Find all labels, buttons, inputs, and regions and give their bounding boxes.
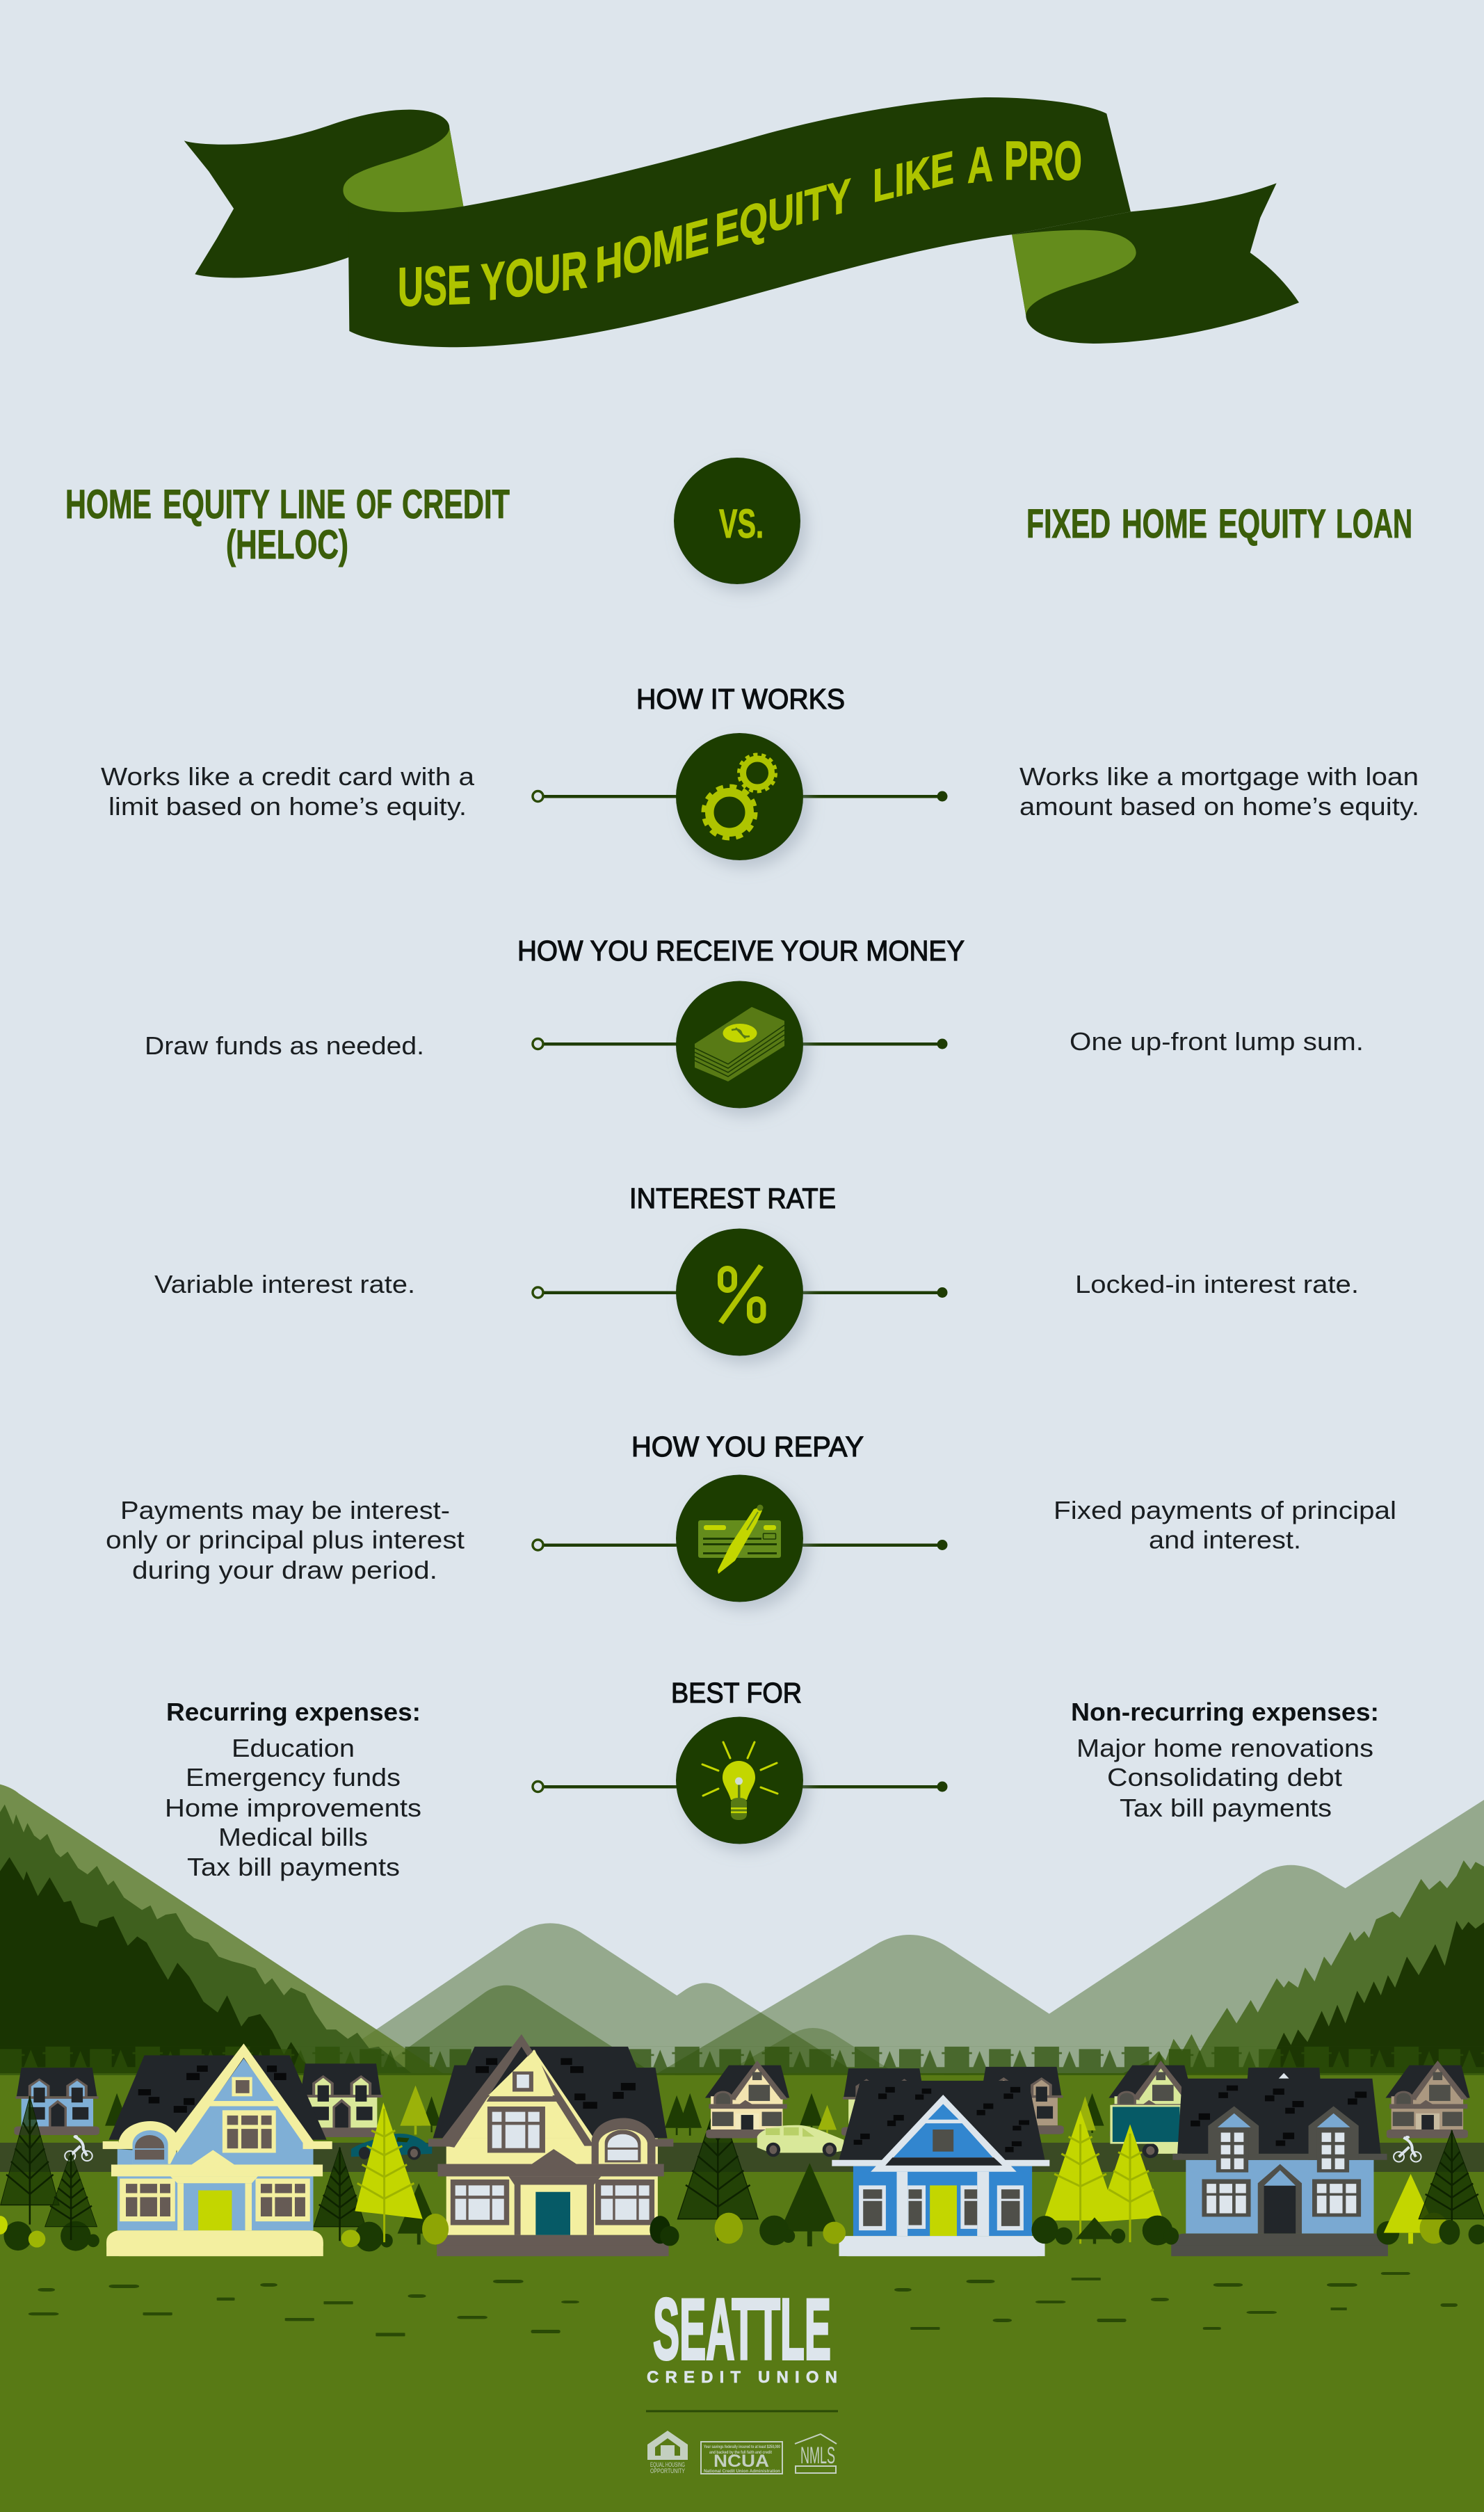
heading: HELOC: LINE (280, 482, 346, 527)
text: fixed how it works: amount based on home’s equity. (1019, 792, 1419, 821)
text: non-recurring expenses (1071, 1698, 1379, 1822)
logo: Seattle Credit Union (647, 2282, 837, 2387)
text: non-recurring expenses: Tax bill payments (1120, 1794, 1332, 1822)
text: recurring expenses: Home improvements (165, 1794, 421, 1822)
blue house (103, 2043, 332, 2256)
connector line: best for (533, 1782, 947, 1792)
banner title text: LIKE (873, 141, 954, 213)
icon: NCUA badge: National Credit Union Administration (704, 2470, 780, 2474)
icon: percent (676, 1228, 803, 1356)
text: non-recurring expenses: Non-recurring expenses: (1071, 1698, 1379, 1726)
icon: NCUA badge (701, 2442, 782, 2474)
heading: HELOC (65, 482, 510, 567)
back houses left (14, 2063, 702, 2137)
section heading: best for: BEST FOR (671, 1677, 802, 1709)
banner title text: PRO (1004, 130, 1082, 192)
icon: equal housing opportunity (647, 2431, 688, 2474)
icon: equal housing opportunity: OPPORTUNITY (650, 2467, 685, 2474)
heading: fixed home equity loan: HOME (1122, 501, 1207, 547)
scenery (0, 1785, 1484, 2512)
logo: Seattle Credit Union: CREDIT UNION (647, 2368, 837, 2387)
text: draw funds: Draw funds as needed. (145, 1031, 424, 1060)
VS circle (674, 458, 800, 584)
heading: HELOC: CREDIT (402, 482, 510, 527)
section heading: how it works: HOW IT WORKS (636, 683, 845, 715)
blue grey house (1171, 2068, 1388, 2256)
text: locked rate: Locked-in interest rate. (1075, 1270, 1359, 1298)
heading: HELOC: HOME (65, 482, 152, 527)
heading: HELOC: EQUITY (163, 482, 270, 527)
text: recurring expenses: Education (232, 1734, 355, 1762)
left trees and shrubs (0, 2096, 758, 2251)
text: non-recurring expenses: Consolidating debt (1107, 1763, 1342, 1792)
banner title text: EQUITY (715, 169, 851, 257)
teal car (351, 2134, 432, 2160)
road (0, 2143, 1484, 2172)
text: fixed payments (1054, 1496, 1396, 1554)
banner title text: A (967, 136, 993, 194)
VS circle: VS. (719, 501, 764, 547)
section heading: how you repay: HOW YOU REPAY (631, 1431, 864, 1463)
connector line: repay (533, 1540, 947, 1550)
icon: NCUA badge: Your savings federally insured to at least $250,000 (704, 2445, 780, 2449)
heading: HELOC: OF (356, 482, 392, 527)
banner title text: YOUR (481, 239, 588, 312)
text: lump sum: One up-front lump sum. (1070, 1027, 1364, 1056)
text: SEATTLE (653, 2282, 831, 2378)
text: payments (106, 1496, 465, 1584)
heading: fixed home equity loan: LOAN (1336, 501, 1412, 547)
icon: NMLS badge (795, 2434, 837, 2473)
text: recurring expenses: Recurring expenses: (166, 1698, 421, 1726)
text: fixed payments: and interest. (1149, 1526, 1301, 1554)
icon: equal housing opportunity: EQUAL HOUSING (650, 2461, 685, 2468)
text: HELOC how it works: limit based on home’s equity. (108, 792, 467, 821)
banner title text (398, 130, 1082, 319)
icon: NCUA badge: and backed by the full faith and credit (709, 2451, 772, 2455)
yellow house (428, 2034, 673, 2256)
connector line: interest (533, 1287, 947, 1298)
heading: fixed home equity loan (1026, 501, 1412, 547)
ground (0, 2073, 1484, 2512)
right neighborhood (705, 2061, 1484, 2256)
heading: HELOC: (HELOC) (226, 522, 348, 567)
text: variable rate: Variable interest rate. (154, 1270, 415, 1298)
icon: gears (676, 733, 803, 860)
icon: NCUA badge: NCUA (713, 2451, 769, 2471)
text: recurring expenses (165, 1698, 421, 1881)
text: recurring expenses: Medical bills (218, 1823, 368, 1851)
connector line: receive (533, 1039, 947, 1049)
green van (757, 2125, 844, 2157)
icon: check and pen (676, 1474, 803, 1602)
title banner (184, 97, 1299, 347)
banner title text: HOME (595, 207, 709, 293)
logo divider (646, 2410, 838, 2412)
text: non-recurring expenses: Major home renovations (1076, 1734, 1373, 1762)
text: payments: only or principal plus interest (106, 1526, 465, 1554)
icon: NMLS badge: NMLS (800, 2442, 835, 2469)
back houses right (705, 2061, 1470, 2139)
cyclist (65, 2136, 92, 2161)
icon: money stack (676, 981, 803, 1109)
left neighborhood (0, 2034, 758, 2256)
section heading: interest rate: INTEREST RATE (629, 1182, 836, 1214)
section heading: how you receive: HOW YOU RECEIVE YOUR MONEY (517, 935, 965, 967)
text: HELOC how it works: Works like a credit card with a (101, 762, 475, 791)
text: HELOC how it works (101, 762, 475, 821)
moving truck (1110, 2105, 1182, 2158)
grass dashes (29, 2272, 1458, 2336)
left mountains and forest (0, 1785, 866, 2079)
banner title text: USE (398, 254, 471, 319)
icon: light bulb (676, 1716, 803, 1844)
text: payments: during your draw period. (132, 1556, 437, 1584)
text: recurring expenses: Emergency funds (186, 1763, 401, 1792)
text: payments: Payments may be interest- (120, 1496, 450, 1524)
connector line: how it works (533, 791, 947, 801)
text: recurring expenses: Tax bill payments (187, 1853, 400, 1881)
text: fixed how it works: Works like a mortgage with loan (1019, 762, 1419, 791)
heading: fixed home equity loan: FIXED (1026, 501, 1111, 547)
right mountains and forest (647, 1800, 1484, 2079)
text: fixed how it works (1019, 762, 1419, 821)
heading: fixed home equity loan: EQUITY (1218, 501, 1326, 547)
right trees and shrubs (759, 2110, 1484, 2246)
distant tree line (0, 2047, 1484, 2075)
text: fixed payments: Fixed payments of principal (1054, 1496, 1396, 1524)
white blue house (832, 2081, 1049, 2256)
